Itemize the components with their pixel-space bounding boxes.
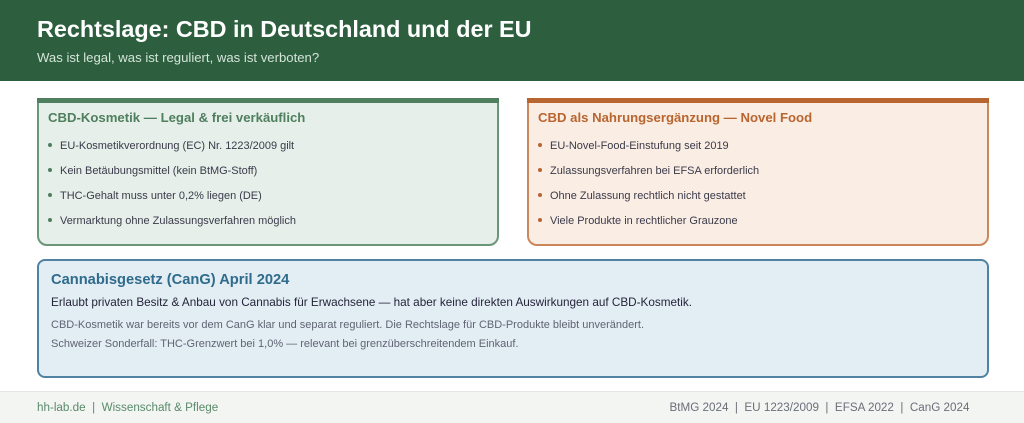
bullet item: THC-Gehalt muss unter 0,2% liegen (DE): [60, 190, 262, 202]
footer: [0, 391, 1024, 423]
panel heading: CBD-Kosmetik — Legal & frei verkäuflich: [48, 110, 305, 125]
panel: CBD-Kosmetik: [37, 98, 499, 246]
lead sentence: Erlaubt privaten Besitz & Anbau von Cannabis für Erwachsene — hat aber keine direkten Auswirkungen auf CBD-Kosmetik.: [51, 296, 692, 309]
bullet item: Viele Produkte in rechtlicher Grauzone: [550, 215, 738, 227]
bullet list: [538, 140, 759, 227]
bullet item: Zulassungsverfahren bei EFSA erforderlich: [550, 165, 759, 177]
footer sources: BtMG 2024 | EU 1223/2009 | EFSA 2022 | CanG 2024: [669, 401, 970, 414]
panel: Cannabisgesetz: [37, 259, 989, 378]
panel top bar: [37, 98, 499, 103]
subtitle: Was ist legal, was ist reguliert, was ist verboten?: [37, 50, 319, 65]
panel heading: CBD als Nahrungsergänzung — Novel Food: [538, 110, 812, 125]
bullet list: [48, 140, 296, 227]
panel heading: Cannabisgesetz (CanG) April 2024: [51, 272, 289, 288]
note: Schweizer Sonderfall: THC-Grenzwert bei 1,0% — relevant bei grenzüberschreitendem Einkauf.: [51, 338, 519, 350]
bullet item: Vermarktung ohne Zulassungsverfahren möglich: [60, 215, 296, 227]
bullet item: Kein Betäubungsmittel (kein BtMG-Stoff): [60, 165, 257, 177]
footer left text: hh-lab.de | Wissenschaft & Pflege: [37, 401, 218, 414]
title: Rechtslage: CBD in Deutschland und der EU: [37, 16, 532, 42]
bullet item: EU-Novel-Food-Einstufung seit 2019: [550, 140, 729, 152]
panel: Novel Food: [527, 98, 989, 246]
panel top bar: [527, 98, 989, 103]
bullet item: Ohne Zulassung rechtlich nicht gestattet: [550, 190, 746, 202]
header band: [0, 0, 1024, 81]
bullet item: EU-Kosmetikverordnung (EC) Nr. 1223/2009 gilt: [60, 140, 294, 152]
note: CBD-Kosmetik war bereits vor dem CanG klar und separat reguliert. Die Rechtslage für CBD-Produkte bleibt unverändert.: [51, 318, 644, 330]
